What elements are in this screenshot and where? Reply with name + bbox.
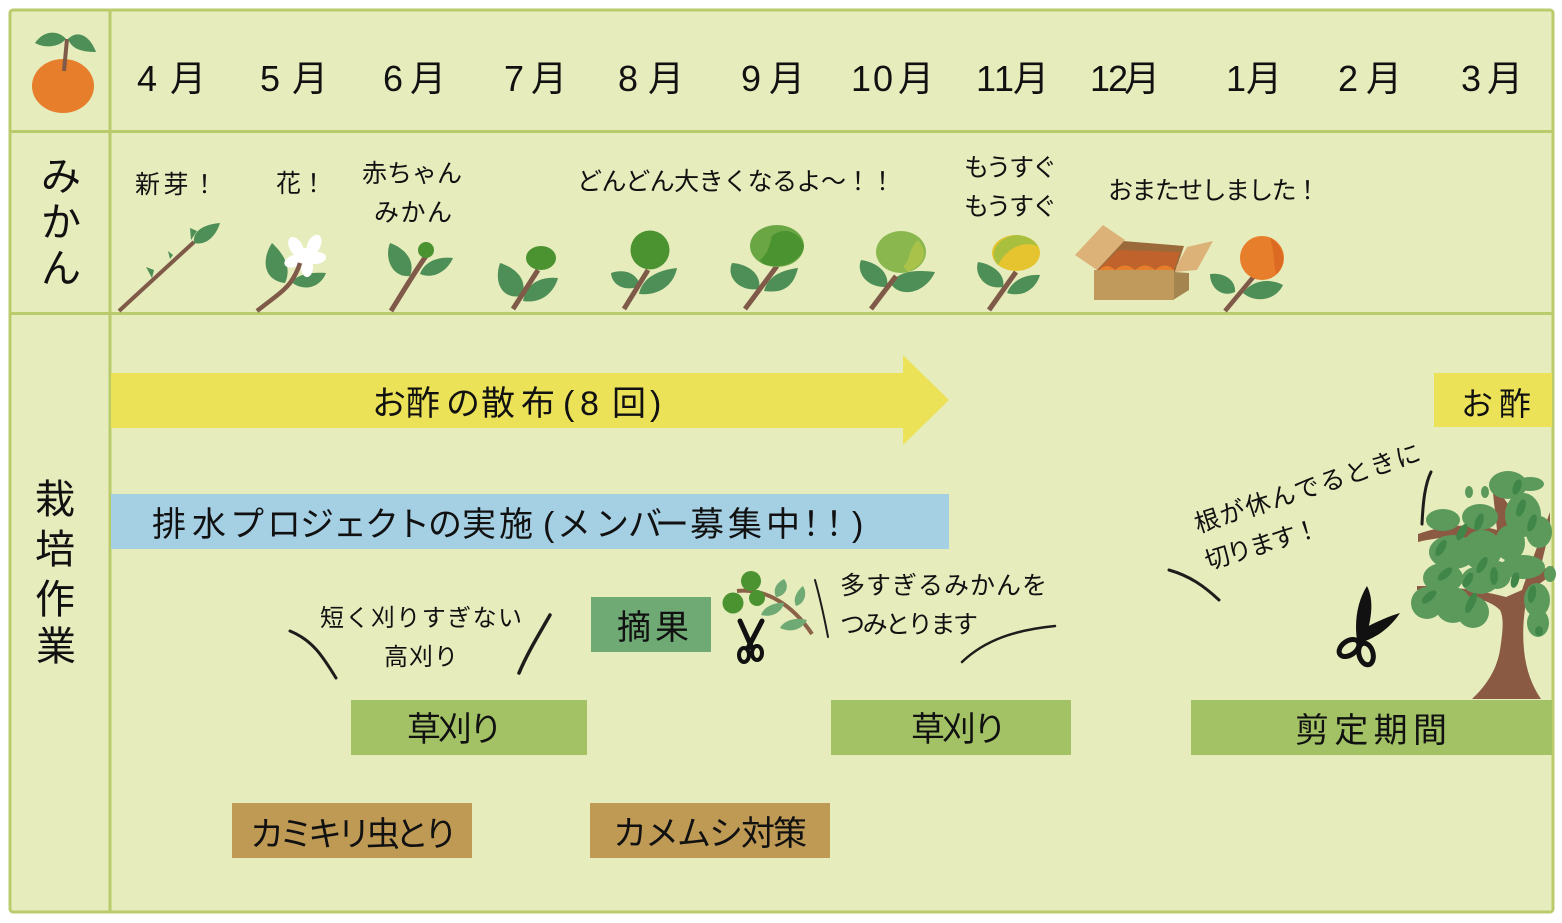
stage captions: もうすぐ xyxy=(964,154,1057,182)
row label: cultivation work xyxy=(35,478,76,669)
icon: new shoot xyxy=(119,223,220,311)
bar: vinegar xyxy=(1434,373,1552,427)
bar: stink bug control: カメムシ対策 xyxy=(613,815,807,853)
row label: mikan xyxy=(41,155,81,291)
bar: pruning period xyxy=(1191,700,1552,755)
icon: large green mikan, September xyxy=(730,225,804,309)
note: thinning excess fruit xyxy=(815,572,1055,662)
note: thinning excess fruit: つみとります xyxy=(840,611,978,639)
arrow: vinegar spraying: お酢の散布(8回) xyxy=(372,385,661,423)
note: high cutting: 短く刈りすぎない xyxy=(320,605,522,632)
stage captions: 赤ちゃん xyxy=(362,160,462,188)
icon: mikan with leaves xyxy=(32,33,96,113)
bar: longhorn beetle removal xyxy=(232,803,472,858)
bar: vinegar: お酢 xyxy=(1461,386,1531,422)
bar: drainage project: 排水プロジェクトの実施(メンバー募集中！！) xyxy=(152,506,863,544)
icon: ripe orange mikan xyxy=(1210,236,1284,311)
row label: cultivation work: 作 xyxy=(35,578,75,622)
note: pruning while roots rest: 切ります！ xyxy=(1202,514,1323,576)
stage captions: もうすぐ xyxy=(964,193,1057,221)
month header row xyxy=(137,58,1523,99)
bar: grass cutting, autumn: 草刈り xyxy=(911,711,1007,749)
month header row: 7月 xyxy=(504,58,567,99)
row label: mikan: み xyxy=(41,155,81,199)
month header row: 11月 xyxy=(976,58,1049,99)
month header row: 12月 xyxy=(1090,58,1160,99)
bar: longhorn beetle removal: カミキリ虫とり xyxy=(250,816,458,854)
bar: drainage project xyxy=(111,494,949,549)
stage captions: 花！ xyxy=(276,170,326,198)
icon: yellow mikan, November xyxy=(977,235,1040,310)
row label: mikan: ん xyxy=(41,247,81,291)
icon: small green mikan, July xyxy=(498,246,558,309)
icon: blossom xyxy=(257,232,326,311)
note: thinning excess fruit: 多すぎるみかんを xyxy=(840,572,1047,600)
icon: baby mikan xyxy=(388,242,453,311)
row label: cultivation work: 業 xyxy=(36,625,76,669)
stage captions: おまたせしました！ xyxy=(1108,177,1320,205)
stage captions xyxy=(135,154,1320,227)
row label: cultivation work: 培 xyxy=(35,528,75,572)
note: high cutting: 高刈り xyxy=(384,644,458,671)
bar: fruit thinning xyxy=(591,597,711,652)
month header row: 3月 xyxy=(1461,58,1523,99)
bar: pruning period: 剪定期間 xyxy=(1295,712,1447,750)
month header row: 9月 xyxy=(741,58,805,99)
month header row: 10月 xyxy=(851,58,934,99)
month header row: 4月 xyxy=(137,58,206,99)
month header row: 1月 xyxy=(1226,58,1282,99)
note: pruning while roots rest xyxy=(1169,439,1431,600)
icon: green mikan, August xyxy=(611,230,677,309)
row label: mikan: か xyxy=(41,201,81,245)
icon: box of mikan xyxy=(1075,225,1213,300)
stage captions: 新芽！ xyxy=(135,171,217,199)
icon: thinning branch and scissors xyxy=(722,571,812,662)
note: high cutting xyxy=(290,605,550,678)
icon: pruning scissors xyxy=(1336,586,1400,666)
month header row: 6月 xyxy=(383,58,446,99)
icon: light green mikan, October xyxy=(860,231,935,309)
row label: cultivation work: 栽 xyxy=(35,478,75,522)
bar: grass cutting, early: 草刈り xyxy=(407,711,503,749)
stage captions: どんどん大きくなるよ〜！！ xyxy=(577,168,895,196)
bar: stink bug control xyxy=(590,803,830,858)
icon: mikan tree xyxy=(1411,471,1556,699)
month header row: 8月 xyxy=(618,58,684,99)
arrow: vinegar spraying xyxy=(111,355,949,445)
bar: grass cutting, early xyxy=(351,700,587,755)
stage captions: みかん xyxy=(374,199,452,227)
note: pruning while roots rest: 根が休んでるときに xyxy=(1191,439,1424,539)
bar: grass cutting, autumn xyxy=(831,700,1071,755)
month header row: 2月 xyxy=(1338,58,1402,99)
month header row: 5月 xyxy=(260,58,328,99)
bar: fruit thinning: 摘果 xyxy=(617,609,689,647)
